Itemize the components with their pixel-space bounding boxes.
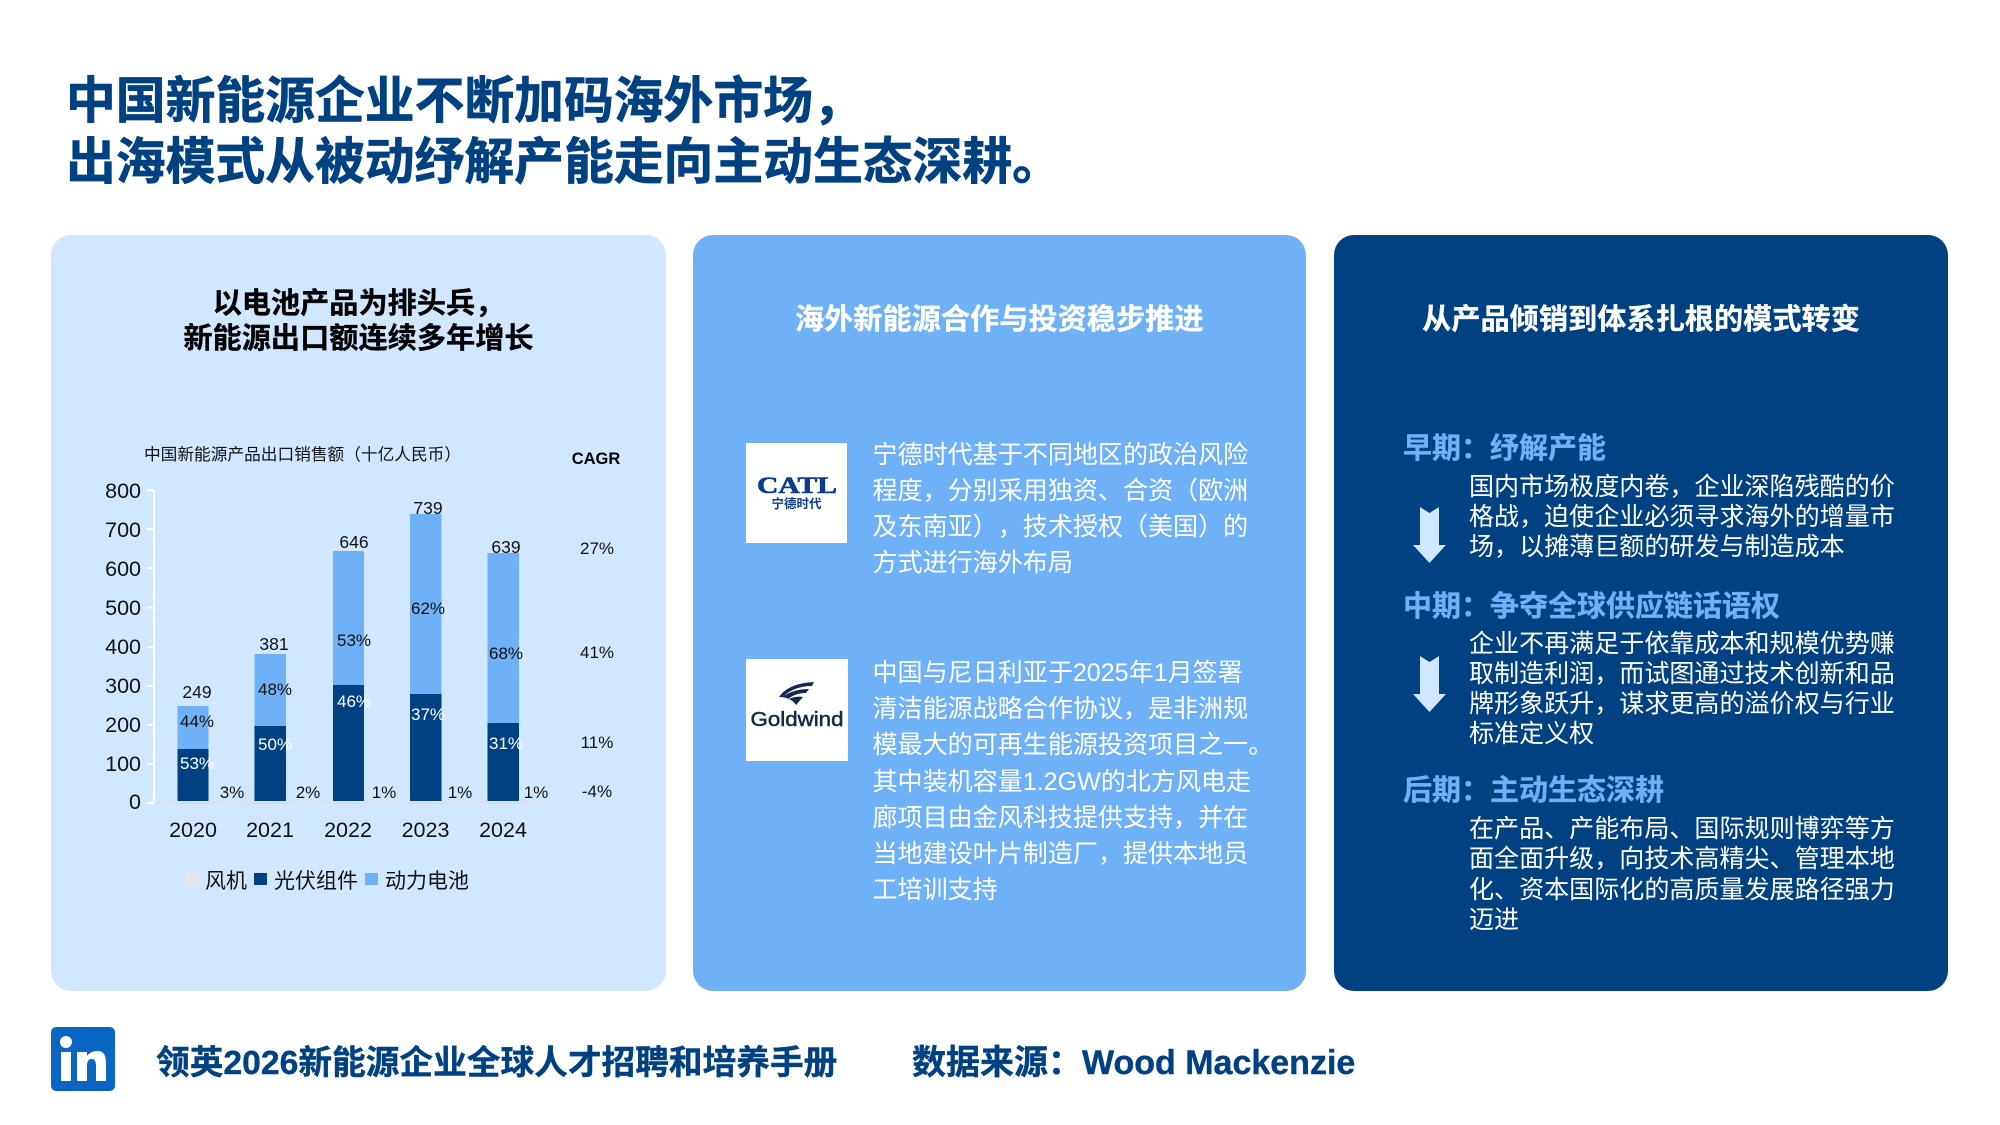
logo: CATL xyxy=(746,443,847,543)
icon: LinkedIn logo xyxy=(51,1027,115,1091)
legend: 光伏组件 xyxy=(274,870,358,893)
x axis year labels: 2024 xyxy=(479,818,527,842)
stage heading: early: 早期：纾解产能 xyxy=(1403,433,1606,465)
stage text: late: 面全面升级，向技术高精尖、管理本地 xyxy=(1469,845,1895,873)
stage text: late: 迈进 xyxy=(1469,906,1519,934)
stage text: late xyxy=(1469,815,1895,934)
CAGR values: 11% xyxy=(581,733,613,752)
stage text: middle xyxy=(1469,630,1895,748)
bars: 2020 xyxy=(178,706,208,801)
text: Goldwind Nigeria project: 清洁能源战略合作协议，是非洲规 xyxy=(872,695,1248,723)
logo: CATL: 宁德时代 xyxy=(771,496,822,511)
CAGR values: -4% xyxy=(582,782,612,801)
y axis labels: 0 xyxy=(129,790,141,814)
y axis labels: 600 xyxy=(105,557,141,581)
x axis year labels: 2020 xyxy=(169,818,217,842)
stage text: middle: 取制造利润，而试图通过技术创新和品 xyxy=(1469,660,1895,688)
CAGR header: CAGR xyxy=(572,450,620,468)
title: 出海模式从被动纾解产能走向主动生态深耕。 xyxy=(66,134,1062,190)
battery share labels: 53% xyxy=(337,631,371,650)
battery share labels: 62% xyxy=(411,599,445,618)
panel: export chart xyxy=(51,235,666,991)
stage text: middle: 标准定义权 xyxy=(1469,720,1594,748)
y axis labels xyxy=(105,479,141,814)
CAGR values xyxy=(580,539,614,801)
panel heading: export growth: 新能源出口额连续多年增长 xyxy=(183,323,534,355)
logo: Goldwind: Goldwind xyxy=(750,709,844,731)
y axis labels: 200 xyxy=(105,713,141,737)
stage text: middle: 企业不再满足于依靠成本和规模优势赚 xyxy=(1469,630,1895,658)
legend: 动力电池 xyxy=(385,870,469,893)
battery share labels: 48% xyxy=(258,680,292,699)
panel heading: export growth: 以电池产品为排头兵， xyxy=(213,288,504,320)
stage text: early: 国内市场极度内卷，企业深陷残酷的价 xyxy=(1469,473,1895,501)
total value labels: 381 xyxy=(259,634,289,654)
panel heading: model shift: 从产品倾销到体系扎根的模式转变 xyxy=(1422,304,1860,336)
total value labels: 639 xyxy=(491,537,521,557)
battery share labels: 68% xyxy=(489,644,523,663)
wind share labels: 1% xyxy=(524,783,548,802)
solar share labels: 37% xyxy=(411,705,445,724)
total value labels: 646 xyxy=(339,532,369,552)
total value labels xyxy=(182,498,521,702)
y axis labels: 300 xyxy=(105,674,141,698)
battery share labels xyxy=(180,599,523,731)
bars: 2023 xyxy=(410,514,442,801)
panel heading: export growth xyxy=(183,288,534,355)
text: Goldwind Nigeria project: 模最大的可再生能源投资项目之一。 xyxy=(872,731,1273,759)
total value labels: 249 xyxy=(182,682,212,702)
y axis labels: 500 xyxy=(105,596,141,620)
battery share labels: 44% xyxy=(180,712,214,731)
chart title: 中国新能源产品出口销售额（十亿人民币） xyxy=(144,445,461,464)
solar share labels: 31% xyxy=(489,734,523,753)
wind share labels: 3% xyxy=(220,783,244,802)
bars: 2024 xyxy=(488,553,519,801)
CAGR values: 41% xyxy=(580,643,614,662)
legend xyxy=(186,870,469,893)
wind share labels: 1% xyxy=(448,783,472,802)
solar share labels: 50% xyxy=(258,735,292,754)
text: Goldwind Nigeria project: 廊项目由金风科技提供支持，并在 xyxy=(872,804,1248,832)
bars: 2021 xyxy=(254,654,286,801)
y axis labels: 400 xyxy=(105,635,141,659)
panel: overseas cooperation xyxy=(692,235,1306,991)
arrow: middle to late xyxy=(1413,656,1446,712)
text: CATL strategy xyxy=(872,441,1248,577)
stacked bar chart: export sales xyxy=(105,445,620,893)
stage text: middle: 牌形象跃升，谋求更高的溢价权与行业 xyxy=(1469,690,1895,718)
solar share labels: 46% xyxy=(337,692,371,711)
text: Goldwind Nigeria project xyxy=(872,659,1273,904)
footer: data source: 数据来源：Wood Mackenzie xyxy=(912,1044,1355,1082)
solar share labels xyxy=(180,692,523,773)
text: CATL strategy: 方式进行海外布局 xyxy=(872,549,1073,577)
text: CATL strategy: 程度，分别采用独资、合资（欧洲 xyxy=(872,477,1248,505)
stage text: early: 格战，迫使企业必须寻求海外的增量市 xyxy=(1469,503,1895,531)
total value labels: 739 xyxy=(413,498,443,518)
text: Goldwind Nigeria project: 当地建设叶片制造厂，提供本地员 xyxy=(872,840,1248,868)
x axis year labels: 2022 xyxy=(324,818,372,842)
y axis labels: 700 xyxy=(105,518,141,542)
stage heading: late: 后期：主动生态深耕 xyxy=(1403,775,1664,807)
CAGR values: 27% xyxy=(580,539,614,558)
y axis xyxy=(147,490,154,803)
wind share labels: 1% xyxy=(372,783,396,802)
footer: report title: 领英2026新能源企业全球人才招聘和培养手册 xyxy=(156,1044,837,1082)
text: Goldwind Nigeria project: 其中装机容量1.2GW的北方风电走 xyxy=(872,768,1251,796)
x axis year labels xyxy=(169,818,527,842)
stage text: late: 在产品、产能布局、国际规则博弈等方 xyxy=(1469,815,1895,843)
panel heading: cooperation: 海外新能源合作与投资稳步推进 xyxy=(795,304,1204,336)
bars: 2022 xyxy=(333,551,364,801)
stage text: late: 化、资本国际化的高质量发展路径强力 xyxy=(1469,876,1895,904)
solar share labels: 53% xyxy=(180,754,214,773)
logo: CATL: CATL xyxy=(757,473,837,498)
text: Goldwind Nigeria project: 中国与尼日利亚于2025年1月签署 xyxy=(872,659,1243,687)
stage text: early xyxy=(1469,473,1895,561)
x axis year labels: 2023 xyxy=(402,818,449,842)
x axis year labels: 2021 xyxy=(246,818,294,842)
logo: Goldwind xyxy=(746,659,848,761)
y axis labels: 800 xyxy=(105,479,141,503)
text: CATL strategy: 及东南亚），技术授权（美国）的 xyxy=(872,513,1248,541)
wind share labels: 2% xyxy=(296,783,320,802)
x axis line xyxy=(154,802,544,804)
title: 中国新能源企业不断加码海外市场， xyxy=(66,73,863,129)
text: Goldwind Nigeria project: 工培训支持 xyxy=(872,876,998,904)
stage heading: middle: 中期：争夺全球供应链话语权 xyxy=(1403,591,1780,623)
title xyxy=(66,73,1062,190)
legend: 风机 xyxy=(205,870,247,893)
y axis labels: 100 xyxy=(105,752,141,776)
panel: model shift xyxy=(1334,235,1948,991)
arrow: early to middle xyxy=(1413,507,1446,563)
stage text: early: 场，以摊薄巨额的研发与制造成本 xyxy=(1469,533,1845,561)
text: CATL strategy: 宁德时代基于不同地区的政治风险 xyxy=(872,441,1248,469)
wind share labels xyxy=(220,783,548,802)
